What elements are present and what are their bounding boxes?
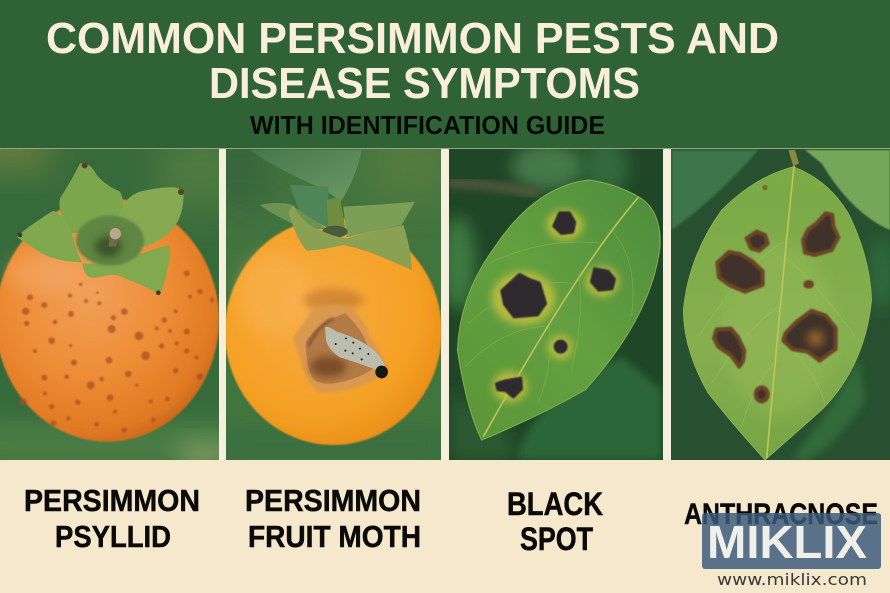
boring hole (293, 305, 388, 393)
fruit: bored persimmon (225, 218, 442, 445)
caption: black spot: SPOT (520, 521, 593, 557)
side veins (465, 230, 633, 403)
psyllid spots (20, 270, 214, 433)
title line 2: DISEASE SYMPTOMS (209, 59, 640, 108)
caption: persimmon psyllid: PSYLLID (55, 519, 171, 554)
background foliage (442, 137, 662, 460)
yellow halos (492, 210, 619, 402)
fruit: spotted persimmon (0, 198, 219, 442)
panel: persimmon fruit moth photo (226, 149, 441, 460)
larva (325, 327, 388, 378)
title line 1: COMMON PERSIMMON PESTS AND (46, 14, 779, 63)
watermark logo (702, 513, 881, 589)
header banner (0, 0, 890, 148)
leaf above fruit (250, 150, 362, 202)
watermark logo: www.miklix.com (717, 570, 867, 589)
calyx (17, 162, 184, 295)
caption: black spot (507, 486, 603, 557)
caption: persimmon fruit moth: FRUIT MOTH (248, 519, 421, 554)
panel: anthracnose photo (671, 149, 890, 460)
panel: black spot photo (442, 137, 663, 460)
diseased leaf (457, 180, 660, 440)
side veins (698, 242, 855, 427)
panel dividers (219, 149, 671, 460)
watermark logo: MIKLIX (707, 516, 867, 568)
black spots (497, 213, 614, 396)
brown lesions (714, 213, 838, 401)
stem and midrib (767, 157, 795, 458)
caption: black spot: BLACK (507, 486, 603, 522)
background foliage (672, 150, 890, 460)
caption: persimmon psyllid (24, 483, 200, 554)
calyx (260, 185, 415, 270)
caption: persimmon fruit moth: PERSIMMON (245, 483, 421, 518)
midrib (483, 197, 638, 437)
caption: persimmon psyllid: PERSIMMON (24, 483, 200, 518)
subtitle: WITH IDENTIFICATION GUIDE (250, 110, 605, 140)
panel: persimmon psyllid photo (0, 149, 219, 460)
diseased leaf (683, 150, 872, 460)
caption: persimmon fruit moth (245, 483, 421, 554)
